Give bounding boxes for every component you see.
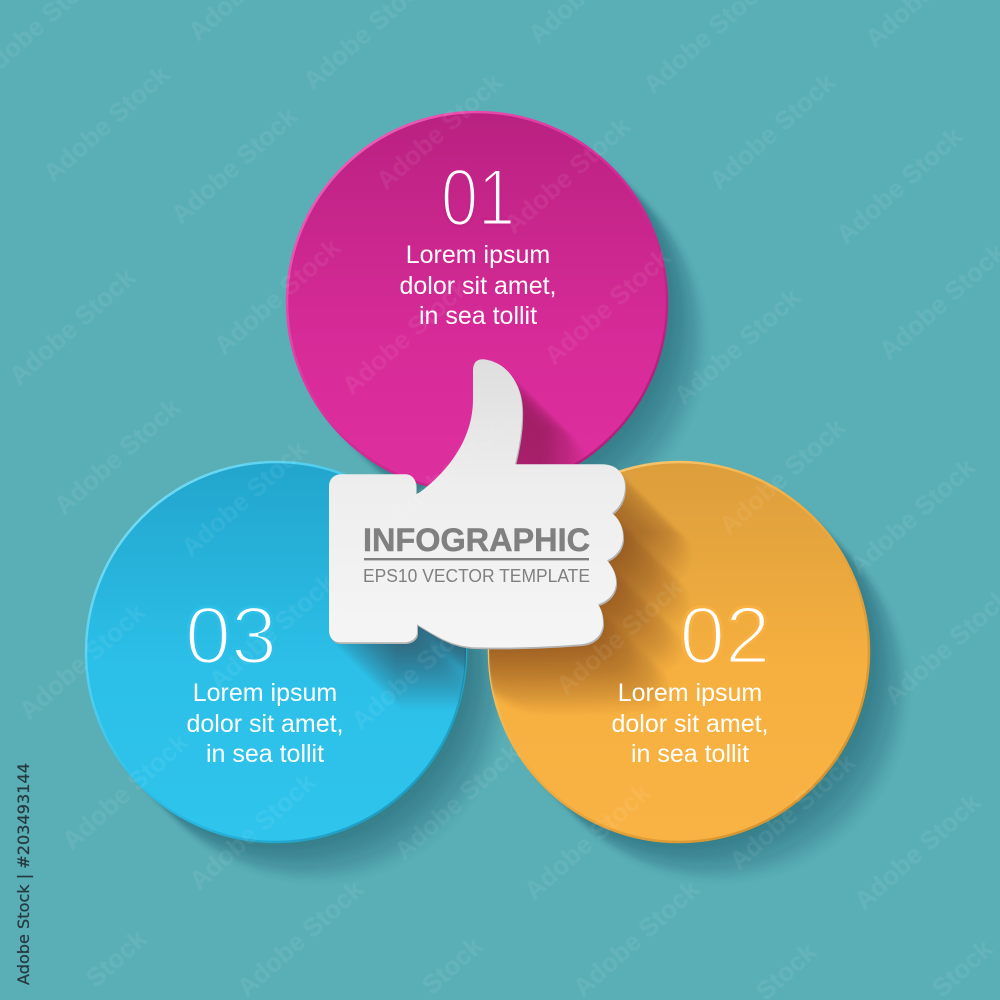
circle long shadows (90, 116, 909, 882)
watermarks: Adobe Stock (550, 572, 688, 701)
watermarks: Adobe Stock (231, 874, 369, 1000)
watermarks: Adobe Stock (3, 262, 141, 391)
text block 02: dolor sit amet, (611, 710, 769, 738)
text block 01: dolor sit amet, (399, 272, 557, 300)
watermarks: Adobe Stock (830, 121, 968, 250)
text block 01: Lorem ipsum (406, 241, 550, 269)
subheading: EPS10 VECTOR TEMPLATE (363, 566, 590, 586)
watermarks: Adobe Stock (388, 737, 526, 866)
text block 03 (186, 679, 344, 768)
number 03: 03 (185, 591, 277, 681)
heading: infographic: INFOGRAPHIC (363, 522, 590, 558)
subheading rule (364, 558, 589, 560)
text block 02: Lorem ipsum (618, 679, 762, 707)
text block 02 (611, 679, 769, 768)
watermarks: Adobe Stock (183, 767, 321, 896)
watermarks: Adobe Stock (567, 874, 705, 1000)
watermarks: Adobe Stock (345, 607, 483, 736)
icon: thumbs up (329, 359, 626, 649)
panel: circle 02 orange (489, 462, 869, 842)
watermarks: Adobe Stock (498, 111, 636, 240)
watermarks: Adobe Stock (208, 232, 346, 361)
watermarks: Stock (80, 923, 153, 993)
watermarks: Adobe Stock (848, 787, 986, 916)
watermarks: Adobe Stock (843, 452, 981, 581)
watermarks: Adobe Stock (703, 67, 841, 196)
watermarks: Adobe Stock (48, 392, 186, 521)
text block 01 (399, 241, 557, 330)
watermarks: Adobe Stock (165, 101, 303, 230)
watermarks: Adobe Stock (336, 272, 474, 401)
text block 03: Lorem ipsum (193, 679, 337, 707)
watermarks: Adobe Stock (37, 59, 175, 188)
watermarks: Adobe Stock (723, 747, 861, 876)
watermarks: Adobe Stock (383, 402, 521, 531)
watermarks: Stock (416, 930, 489, 1000)
text block 03: dolor sit amet, (186, 710, 344, 738)
watermarks: Adobe Stock (175, 434, 313, 563)
watermarks: Adobe Stock (518, 777, 656, 906)
watermarks: Adobe Stock (668, 282, 806, 411)
panel: circle 03 blue (86, 462, 466, 842)
watermarks: Adobe Stock (56, 727, 194, 856)
watermarks: Adobe Stock (370, 67, 508, 196)
watermarks: Adobe Stock (538, 242, 676, 371)
number 01: 01 (441, 153, 515, 243)
watermarks: Adobe Stock (13, 597, 151, 726)
number 02: 02 (680, 591, 770, 681)
text block 01: in sea tollit (419, 302, 537, 330)
vertical credit text: Adobe Stock | #203493144 (14, 763, 33, 985)
watermarks: Adobe Stock (203, 567, 341, 696)
watermarks: Adobe Stock (713, 412, 851, 541)
text block 03: in sea tollit (206, 740, 324, 768)
panel: circle 01 magenta (287, 112, 667, 492)
text block 02: in sea tollit (631, 740, 749, 768)
thumb long shadow (332, 363, 691, 714)
